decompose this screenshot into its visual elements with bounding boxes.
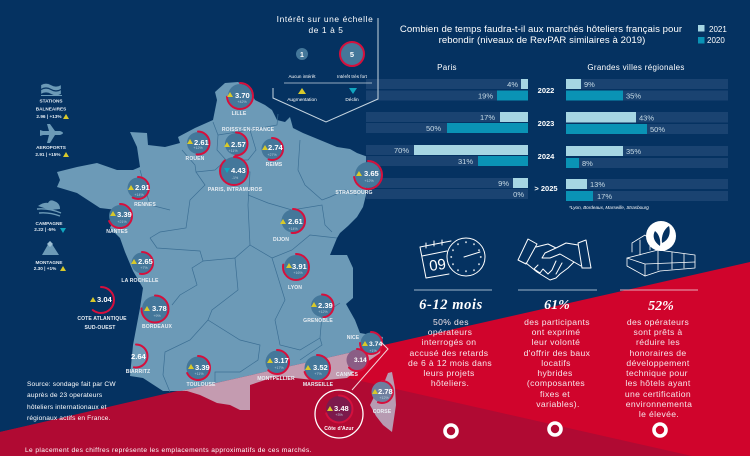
legend: interest scale: Aucun intérêt — [288, 74, 316, 79]
panel: 52%: une certification — [625, 389, 691, 399]
panel: 6-12 mois — [408, 290, 492, 388]
marker: Montpellier: 3.17 — [274, 356, 289, 365]
marker: Lille — [227, 83, 253, 117]
segment: campagne: CAMPAGNE — [36, 221, 62, 226]
marker: Marseille — [303, 355, 334, 388]
legend: interest scale — [273, 14, 378, 122]
marker: Dijon: +14% — [288, 227, 298, 231]
bar chart: Grandes villes régionales: 9% — [584, 80, 595, 89]
bar chart: Grandes villes régionales: 13% — [590, 180, 605, 189]
legend: interest scale: 1 — [300, 52, 304, 59]
panel: 6-12 mois: accusé des retards — [410, 348, 488, 358]
legend: interest scale: 5 — [350, 50, 354, 59]
segment: aéroports — [35, 124, 69, 157]
icon: handshake — [518, 239, 591, 280]
marker: ring 1 — [445, 425, 457, 437]
panel: 6-12 mois: interrogés on — [422, 337, 476, 347]
marker: Lyon: 3.91 — [292, 262, 308, 271]
segment: campagne — [34, 200, 66, 233]
panel: 52%: réduire les — [636, 337, 680, 347]
marker: Montpellier — [257, 350, 295, 382]
marker: Lille: +42% — [237, 100, 247, 104]
bar chart: Grandes villes régionales: *Lyon, Bordeaux, Marseille, Strasbourg — [569, 205, 649, 210]
marker: Lyon — [283, 254, 309, 291]
panel: 61%: ont exprimé — [532, 327, 580, 337]
segment: campagne: 2.22 | -5% — [34, 227, 57, 232]
marker: Rouen: 2.61 — [194, 138, 210, 147]
marker: Grenoble: GRENOBLE — [303, 318, 333, 324]
marker: Marseille: 3.52 — [313, 363, 328, 372]
marker: Dijon — [273, 209, 305, 243]
segment: stations balnéaires: 2.96 | +13% — [36, 114, 62, 119]
marker: Marseille: MARSEILLE — [303, 382, 334, 388]
marker: Rouen: +12% — [193, 146, 203, 150]
panel: 6-12 mois: leurs projets — [423, 368, 475, 378]
legend: interest scale: de 1 à 5 — [308, 25, 344, 35]
panel: 6-12 mois: de 6 à 12 mois dans — [408, 358, 492, 368]
marker: Nice: 3.74 — [369, 341, 382, 348]
source note: régionaux actifs en France. — [27, 415, 111, 422]
marker: Cannes — [336, 349, 368, 378]
marker: Rennes: +14% — [134, 193, 144, 197]
source note: Source: sondage fait par CW — [27, 381, 116, 388]
marker: Toulouse: TOULOUSE — [186, 382, 216, 388]
bar chart: Paris: 4% — [507, 80, 518, 89]
segment: aéroports: AEROPORTS — [36, 145, 66, 150]
panel: 6-12 mois: 50% des — [433, 317, 469, 327]
panel: 52%: environnementa — [626, 399, 692, 409]
segment: montagne: 2.30 | +1% — [34, 266, 57, 271]
marker: Strasbourg: +12% — [364, 179, 374, 183]
panel: 61%: hybrides — [537, 368, 573, 378]
bar chart: Grandes villes régionales: 43% — [639, 114, 654, 122]
marker: Strasbourg: STRASBOURG — [335, 190, 373, 196]
panel: 61%: fixes et — [540, 389, 570, 399]
marker: Grenoble: 2.39 — [318, 301, 333, 310]
panel: 52%: le élevée. — [639, 409, 679, 419]
map of France — [57, 82, 396, 432]
marker: Marseille: +7% — [314, 372, 322, 376]
marker: Montpellier: MONTPELLIER — [257, 376, 295, 382]
marker: La Rochelle — [121, 252, 159, 284]
marker: Rennes: 2.91 — [135, 183, 151, 192]
marker: Biarritz: BIARRITZ — [126, 369, 150, 375]
marker: Toulouse — [186, 356, 216, 388]
icon: calendar and clock — [420, 238, 485, 278]
year labels: > 2025 — [534, 184, 558, 193]
panel: 52%: technique pour — [626, 368, 688, 378]
marker: Cannes: CANNES — [336, 372, 359, 378]
bar chart: Grandes villes régionales: Grandes villes régionales — [587, 63, 685, 72]
bar chart: Grandes villes régionales: 17% — [597, 192, 612, 201]
marker: ring 3 — [654, 424, 666, 436]
marker: Toulouse: 3.39 — [195, 363, 210, 372]
marker: Nantes: +21% — [117, 220, 127, 224]
marker: Paris intramuros: PARIS, INTRAMUROS — [208, 187, 263, 193]
marker: Corse: 2.78 — [378, 387, 393, 396]
marker: Corse: CORSE — [373, 409, 392, 415]
marker: La Rochelle: LA ROCHELLE — [121, 278, 159, 284]
marker: Lille: 3.70 — [235, 91, 250, 100]
marker: Nantes: 3.39 — [117, 210, 132, 219]
panel: 52%: sont prêts à — [633, 327, 683, 337]
marker: Lyon: +16% — [293, 271, 303, 275]
marker: Nantes — [106, 204, 132, 235]
icon: green building — [627, 221, 695, 276]
marker: Strasbourg — [335, 161, 382, 196]
panel: 61% — [518, 290, 597, 409]
marker: Grenoble — [303, 294, 334, 324]
segment: stations balnéaires — [36, 84, 69, 119]
segment: montagne — [34, 241, 66, 271]
marker: Bordeaux: +9% — [153, 314, 161, 318]
bar chart: Paris: 19% — [478, 92, 493, 100]
bar chart: Paris: 70% — [394, 146, 409, 155]
marker: Rennes: RENNES — [134, 202, 156, 208]
marker: Dijon: DIJON — [273, 237, 289, 243]
legend: interest scale: Intérêt sur une échelle — [277, 14, 373, 24]
panel: 52%: des opérateurs — [627, 317, 689, 327]
marker: Bordeaux — [142, 296, 172, 330]
marker: Reims: REIMS — [266, 162, 283, 168]
bar chart: Paris: 50% — [426, 124, 441, 133]
marker: La Rochelle: 2.65 — [138, 257, 154, 266]
marker: Reims: +27% — [267, 153, 277, 157]
bar chart: Grandes villes régionales: 8% — [582, 159, 593, 168]
panel: 52%: 52% — [648, 299, 674, 314]
panel: 61%: 61% — [544, 298, 570, 313]
callout: Côte d'Azur: Côte d'Azur — [324, 426, 354, 432]
bar chart: Paris: 17% — [480, 113, 495, 122]
marker: Biarritz — [124, 344, 150, 375]
header: recovery chart title: Combien de temps faudra-t-il aux marchés hôteliers français pour — [400, 24, 682, 35]
bar chart: Grandes villes régionales: 50% — [650, 125, 665, 134]
marker: Rouen — [186, 132, 210, 162]
bar chart: Grandes villes régionales — [566, 63, 728, 210]
bar chart: Paris: 9% — [498, 179, 509, 188]
marker: Reims: 2.74 — [268, 143, 284, 152]
callout: Côte d'Azur — [315, 342, 388, 438]
marker: Roissy-en-France: +11% — [228, 149, 238, 153]
marker: Paris intramuros: 4.43 — [231, 166, 246, 175]
marker: Bordeaux: 3.78 — [152, 304, 167, 313]
source note: auprès de 23 operateurs — [27, 392, 103, 399]
legend: years: 2021 — [709, 25, 727, 34]
bar chart: Paris: 31% — [458, 157, 473, 166]
marker: Grenoble: +12% — [318, 310, 328, 314]
marker: Côte Atlantique Sud-Ouest — [77, 287, 127, 331]
legend: years: 2020 — [707, 36, 725, 45]
marker: Corse: +12% — [379, 396, 389, 400]
marker: Rennes — [127, 177, 156, 208]
panel: 61%: (composantes — [527, 378, 585, 388]
panel: 61%: variables). — [536, 399, 580, 409]
panel: 52%: développement — [626, 358, 690, 368]
marker: Nice: NICE — [347, 335, 360, 341]
panel: 6-12 mois: hôteliers. — [431, 378, 469, 388]
marker: Paris intramuros — [208, 157, 263, 193]
source note — [27, 381, 116, 422]
callout: Côte d'Azur: +3% — [335, 413, 343, 417]
legend: interest scale: Augmentation — [287, 97, 317, 103]
panel: 61%: des participants — [524, 317, 590, 327]
panel: 6-12 mois: 6-12 mois — [419, 297, 483, 313]
bar chart: Grandes villes régionales: 35% — [626, 92, 641, 100]
marker: Côte Atlantique Sud-Ouest: COTE ATLANTIQUE — [77, 316, 127, 322]
legend: interest scale: Intérêt très fort — [337, 74, 368, 79]
panel: 6-12 mois: opérateurs — [428, 327, 472, 337]
marker: ring 2 — [549, 423, 561, 435]
icon: calendar and clock: 09 — [428, 256, 447, 275]
marker: Toulouse: +11% — [194, 372, 204, 376]
marker: Biarritz: 2.64 — [131, 352, 147, 361]
red diagonal band — [0, 262, 750, 456]
marker: Roissy-en-France: 2.57 — [231, 140, 246, 149]
marker: Lyon: LYON — [288, 285, 302, 291]
marker: Côte Atlantique Sud-Ouest: 3.04 — [97, 295, 113, 304]
panel: 61%: leur volonté — [532, 337, 580, 347]
marker: Rouen: ROUEN — [186, 156, 205, 162]
panel: 61%: d'offrir des baux — [524, 348, 591, 358]
marker: La Rochelle: +7% — [140, 266, 148, 270]
marker: Nice: +1% — [369, 349, 377, 353]
marker: Nantes: NANTES — [106, 229, 128, 235]
segment: montagne: MONTAGNE — [36, 260, 62, 265]
segment: aéroports: 2.91 | +15% — [35, 152, 61, 157]
marker: Dijon: 2.61 — [288, 217, 304, 226]
marker: Roissy-en-France: ROISSY-EN-FRANCE — [222, 127, 275, 133]
marker: Montpellier: +17% — [274, 366, 284, 370]
marker: Côte Atlantique Sud-Ouest: SUD-OUEST — [85, 325, 116, 331]
marker: Bordeaux: BORDEAUX — [142, 324, 172, 330]
marker: Corse — [371, 381, 393, 415]
callout: Côte d'Azur: 3.48 — [334, 404, 349, 413]
segment: stations balnéaires: STATIONS — [39, 98, 63, 104]
marker: Paris intramuros: -1% — [232, 176, 239, 180]
year labels: 2024 — [538, 152, 555, 161]
placement note: Le placement des chiffres représente les emplacements approximatifs de ces marchés. — [25, 447, 312, 454]
panel: 52% — [620, 290, 698, 419]
year labels — [534, 86, 558, 193]
source note: hôteliers internationaux et — [27, 404, 107, 411]
marker: Reims — [261, 138, 284, 168]
panel: 52%: honoraires de — [629, 348, 687, 358]
bar chart: Paris: 0% — [513, 190, 524, 199]
year labels: 2022 — [538, 86, 554, 95]
marker: Roissy-en-France — [222, 127, 275, 156]
marker: Strasbourg: 3.65 — [364, 169, 380, 178]
marker: Cannes: 3.14 — [354, 357, 367, 364]
marker: Lille: LILLE — [232, 111, 247, 117]
panel: 52%: les hôtels ayant — [625, 378, 691, 388]
bar chart: Paris: Paris — [437, 63, 457, 72]
bar chart: Paris — [366, 63, 528, 199]
legend: years — [698, 25, 727, 45]
panel: 61%: locatifs — [541, 358, 571, 368]
dark red diagonal band — [0, 365, 692, 456]
bar chart: Grandes villes régionales: 35% — [626, 147, 641, 156]
segment: stations balnéaires: BALNEAIRES — [36, 106, 66, 112]
year labels: 2023 — [538, 119, 554, 128]
header: recovery chart title: rebondir (niveaux de RevPAR similaires à 2019) — [439, 35, 645, 46]
marker: Nice — [347, 332, 382, 354]
legend: interest scale: Déclin — [345, 97, 359, 103]
